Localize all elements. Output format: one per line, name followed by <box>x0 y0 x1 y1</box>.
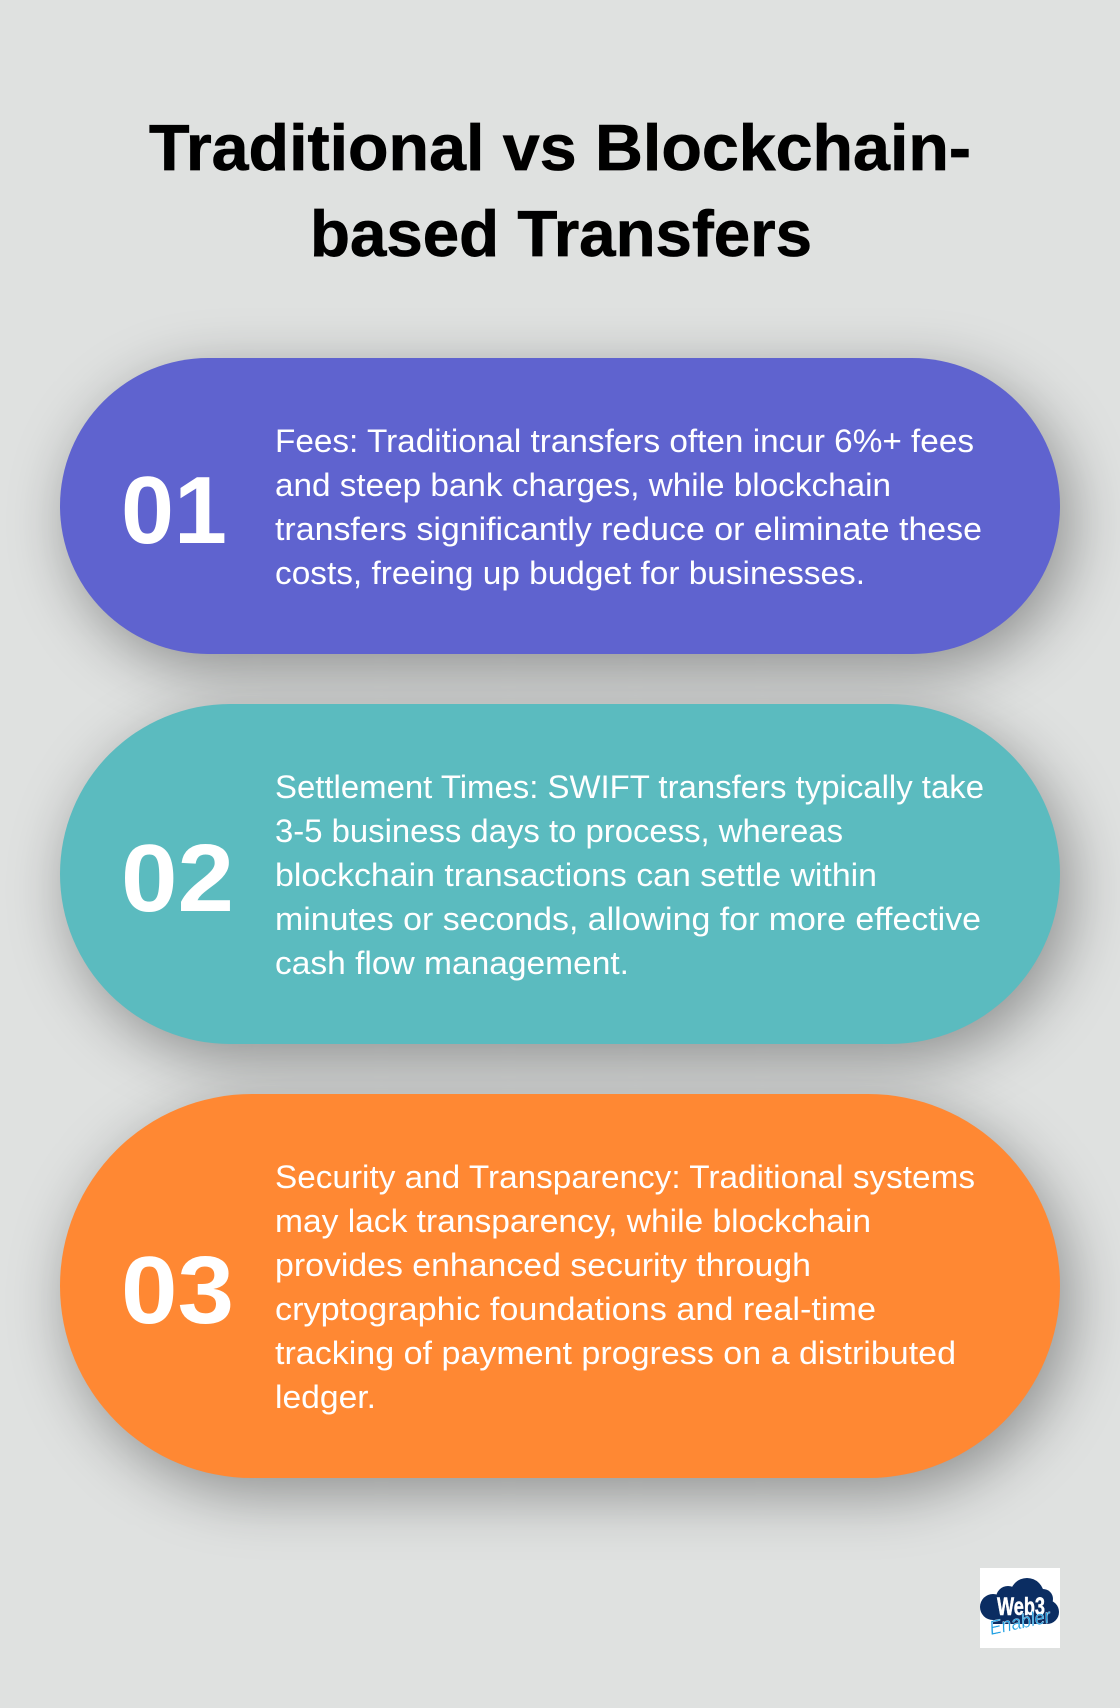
title <box>149 111 971 270</box>
number 03: 03 <box>121 1237 234 1344</box>
text: fees description: and steep bank charges, while blockchain <box>275 467 891 503</box>
text: security description: cryptographic foundations and real-time <box>275 1291 876 1327</box>
text: security description: Security and Transparency: Traditional systems <box>275 1159 975 1195</box>
text: security description: tracking of payment progress on a distributed <box>275 1335 956 1371</box>
title: Traditional vs Blockchain- <box>149 111 971 184</box>
text: security description: may lack transparency, while blockchain <box>275 1203 871 1239</box>
text: fees description: transfers significantly reduce or eliminate these <box>275 511 982 547</box>
icon: cloud <box>980 1578 1059 1624</box>
text: security description: ledger. <box>275 1379 376 1415</box>
number 02: 02 <box>121 825 234 932</box>
text: settlement description: 3-5 business days to process, whereas <box>275 813 843 849</box>
text: settlement description: blockchain transactions can settle within <box>275 857 877 893</box>
text: security description: provides enhanced security through <box>275 1247 811 1283</box>
logo wordmark: Enabler: Enabler <box>987 1605 1054 1640</box>
panel: settlement times <box>60 704 1060 1044</box>
text: fees description: Fees: Traditional transfers often incur 6%+ fees <box>275 423 974 459</box>
panel: security and transparency <box>60 1094 1060 1478</box>
logo: Web3 Enabler <box>980 1568 1060 1648</box>
number 01: 01 <box>121 457 227 564</box>
text: security description <box>275 1159 975 1415</box>
text: fees description <box>275 423 982 591</box>
text: settlement description: minutes or seconds, allowing for more effective <box>275 901 981 937</box>
text: settlement description: cash flow management. <box>275 945 629 981</box>
title: based Transfers <box>310 197 812 270</box>
panel: fees <box>60 358 1060 654</box>
text: fees description: costs, freeing up budget for businesses. <box>275 555 865 591</box>
text: settlement description: Settlement Times: SWIFT transfers typically take <box>275 769 984 805</box>
text: settlement description <box>275 769 984 981</box>
